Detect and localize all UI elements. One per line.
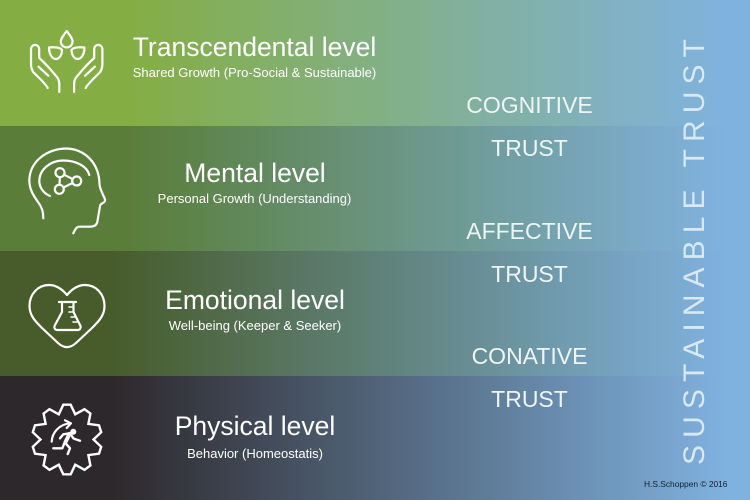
subtitle: shared growth: Shared Growth (Pro-Social & Sustainable) [133,65,376,80]
title: emotional level: Emotional level [165,285,345,315]
icon: gear with runner [32,404,102,476]
subtitle: behavior: Behavior (Homeostatis) [187,446,323,461]
label: cognitive trust: COGNITIVE [466,92,593,118]
icon: head with network [28,147,106,234]
icon: hands holding plant [30,30,104,94]
credit: H.S.Schoppen © 2016 [644,479,727,489]
title: transcendental level: Transcendental level [133,32,376,62]
label: affective trust: TRUST [491,261,568,287]
label: conative trust [472,343,587,412]
panel: transcendental level band [0,0,750,126]
label: conative trust: TRUST [491,386,568,412]
label: cognitive trust: TRUST [491,135,568,161]
panel: emotional level band [0,251,750,376]
heading: physical level [175,411,335,461]
icon: heart with flask [28,284,106,348]
label: affective trust: AFFECTIVE [466,218,593,244]
title: physical level: Physical level [175,411,335,441]
subtitle: personal growth: Personal Growth (Understanding) [158,191,351,206]
panel: physical level band [0,376,750,500]
label: affective trust [466,218,593,287]
panel: mental level band [0,126,750,251]
label: conative trust: CONATIVE [472,343,587,369]
heading: mental level [158,158,351,206]
subtitle: well-being: Well-being (Keeper & Seeker) [169,318,341,333]
vertical label: sustainable trust: SUSTAINABLE TRUST [678,39,711,465]
title: mental level: Mental level [184,158,326,188]
heading: transcendental level [133,32,376,80]
heading: emotional level [165,285,345,333]
label: cognitive trust [466,92,593,161]
